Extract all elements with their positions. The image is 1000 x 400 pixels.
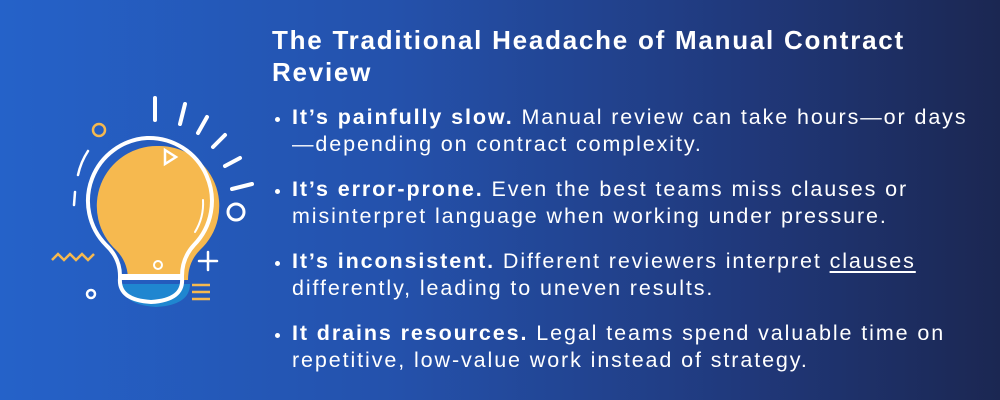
bullet list bbox=[275, 105, 967, 372]
bullet list: It drains resources. Legal teams spend valuable time on bbox=[292, 321, 945, 345]
bullet list: It’s painfully slow. Manual review can take hours—or days bbox=[292, 105, 967, 129]
bullet list: repetitive, low-value work instead of strategy. bbox=[292, 348, 809, 372]
title: The Traditional Headache of Manual Contract bbox=[272, 25, 905, 55]
title: Review bbox=[272, 57, 372, 87]
title bbox=[272, 25, 905, 87]
bullet list: misinterpret language when working under pressure. bbox=[292, 204, 888, 228]
bullet list: differently, leading to uneven results. bbox=[292, 276, 714, 300]
bulb fill bbox=[97, 146, 219, 307]
bulb outline bbox=[88, 138, 212, 302]
decorations bbox=[74, 98, 252, 298]
bullet list: It’s error-prone. Even the best teams miss clauses or bbox=[292, 177, 908, 201]
bullet list: It’s inconsistent. Different reviewers interpret clauses bbox=[292, 249, 916, 273]
bullet list: —depending on contract complexity. bbox=[292, 132, 703, 156]
icon: lightbulb bbox=[51, 96, 254, 307]
